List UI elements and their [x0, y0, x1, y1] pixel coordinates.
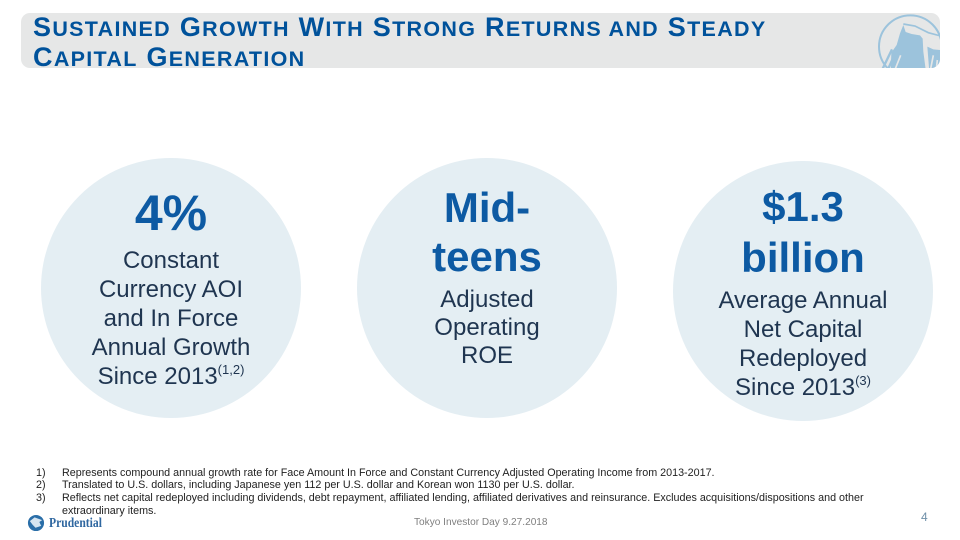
footnote 1: 1)	[36, 466, 46, 478]
description: AOI growth: Constant	[123, 247, 219, 274]
description: ROE: Operating	[434, 314, 540, 341]
footnotes: Translated to U.S. dollars, including Japanese yen 112 per U.S. dollar and Korean won 1130 per U.S. dollar.	[62, 479, 575, 491]
title banner	[21, 13, 940, 68]
icon: logo rock	[28, 515, 44, 531]
stat: 4%: 4%	[135, 185, 207, 241]
footer: event name: Tokyo Investor Day 9.27.2018	[414, 517, 548, 528]
logo wordmark: Prudential	[49, 516, 102, 531]
footnotes	[36, 466, 864, 517]
description: capital redeployed: Since 2013(3)	[735, 373, 871, 401]
description: capital redeployed	[718, 287, 888, 401]
stat: $1.3 billion	[741, 183, 865, 281]
description: capital redeployed: Redeployed	[739, 345, 867, 372]
description: ROE	[434, 286, 540, 369]
footnote 2	[36, 479, 575, 491]
icon: Prudential rock watermark	[878, 14, 940, 68]
footnotes: Reflects net capital redeployed including dividends, debt repayment, affiliated lending, affiliated derivatives and reinsurance. Excludes acquisitions/dispositions and other	[62, 492, 864, 504]
title	[33, 13, 766, 68]
stat: mid-teens: teens	[432, 233, 542, 280]
logo: Prudential	[28, 515, 102, 531]
footnote 3	[36, 492, 864, 517]
description: AOI growth: and In Force	[104, 305, 238, 332]
stat: $1.3 billion: billion	[741, 234, 865, 281]
description: capital redeployed: Net Capital	[744, 316, 862, 343]
description: AOI growth: Currency AOI	[99, 276, 243, 303]
page number: 4	[921, 510, 928, 524]
description: AOI growth: Annual Growth	[92, 334, 250, 361]
description: AOI growth: Since 2013(1,2)	[98, 362, 244, 390]
footnotes: extraordinary items.	[62, 505, 156, 517]
description: ROE: Adjusted	[440, 286, 534, 313]
panel: capital redeployed	[673, 161, 933, 421]
description: ROE: ROE	[461, 342, 513, 369]
footnote 1	[36, 466, 715, 478]
description: capital redeployed: Average Annual	[718, 287, 888, 314]
description: AOI growth	[92, 247, 250, 390]
stat: $1.3 billion: $1.3	[762, 183, 844, 230]
stat: mid-teens	[432, 184, 542, 280]
stat: mid-teens: Mid-	[444, 184, 530, 231]
footnotes: Represents compound annual growth rate for Face Amount In Force and Constant Currency Adjusted Operating Income from 2013-2017.	[62, 466, 715, 478]
footnote 3: 3)	[36, 492, 46, 504]
panel: ROE	[357, 158, 617, 418]
footnote 2: 2)	[36, 479, 46, 491]
panel: AOI growth	[41, 158, 301, 418]
